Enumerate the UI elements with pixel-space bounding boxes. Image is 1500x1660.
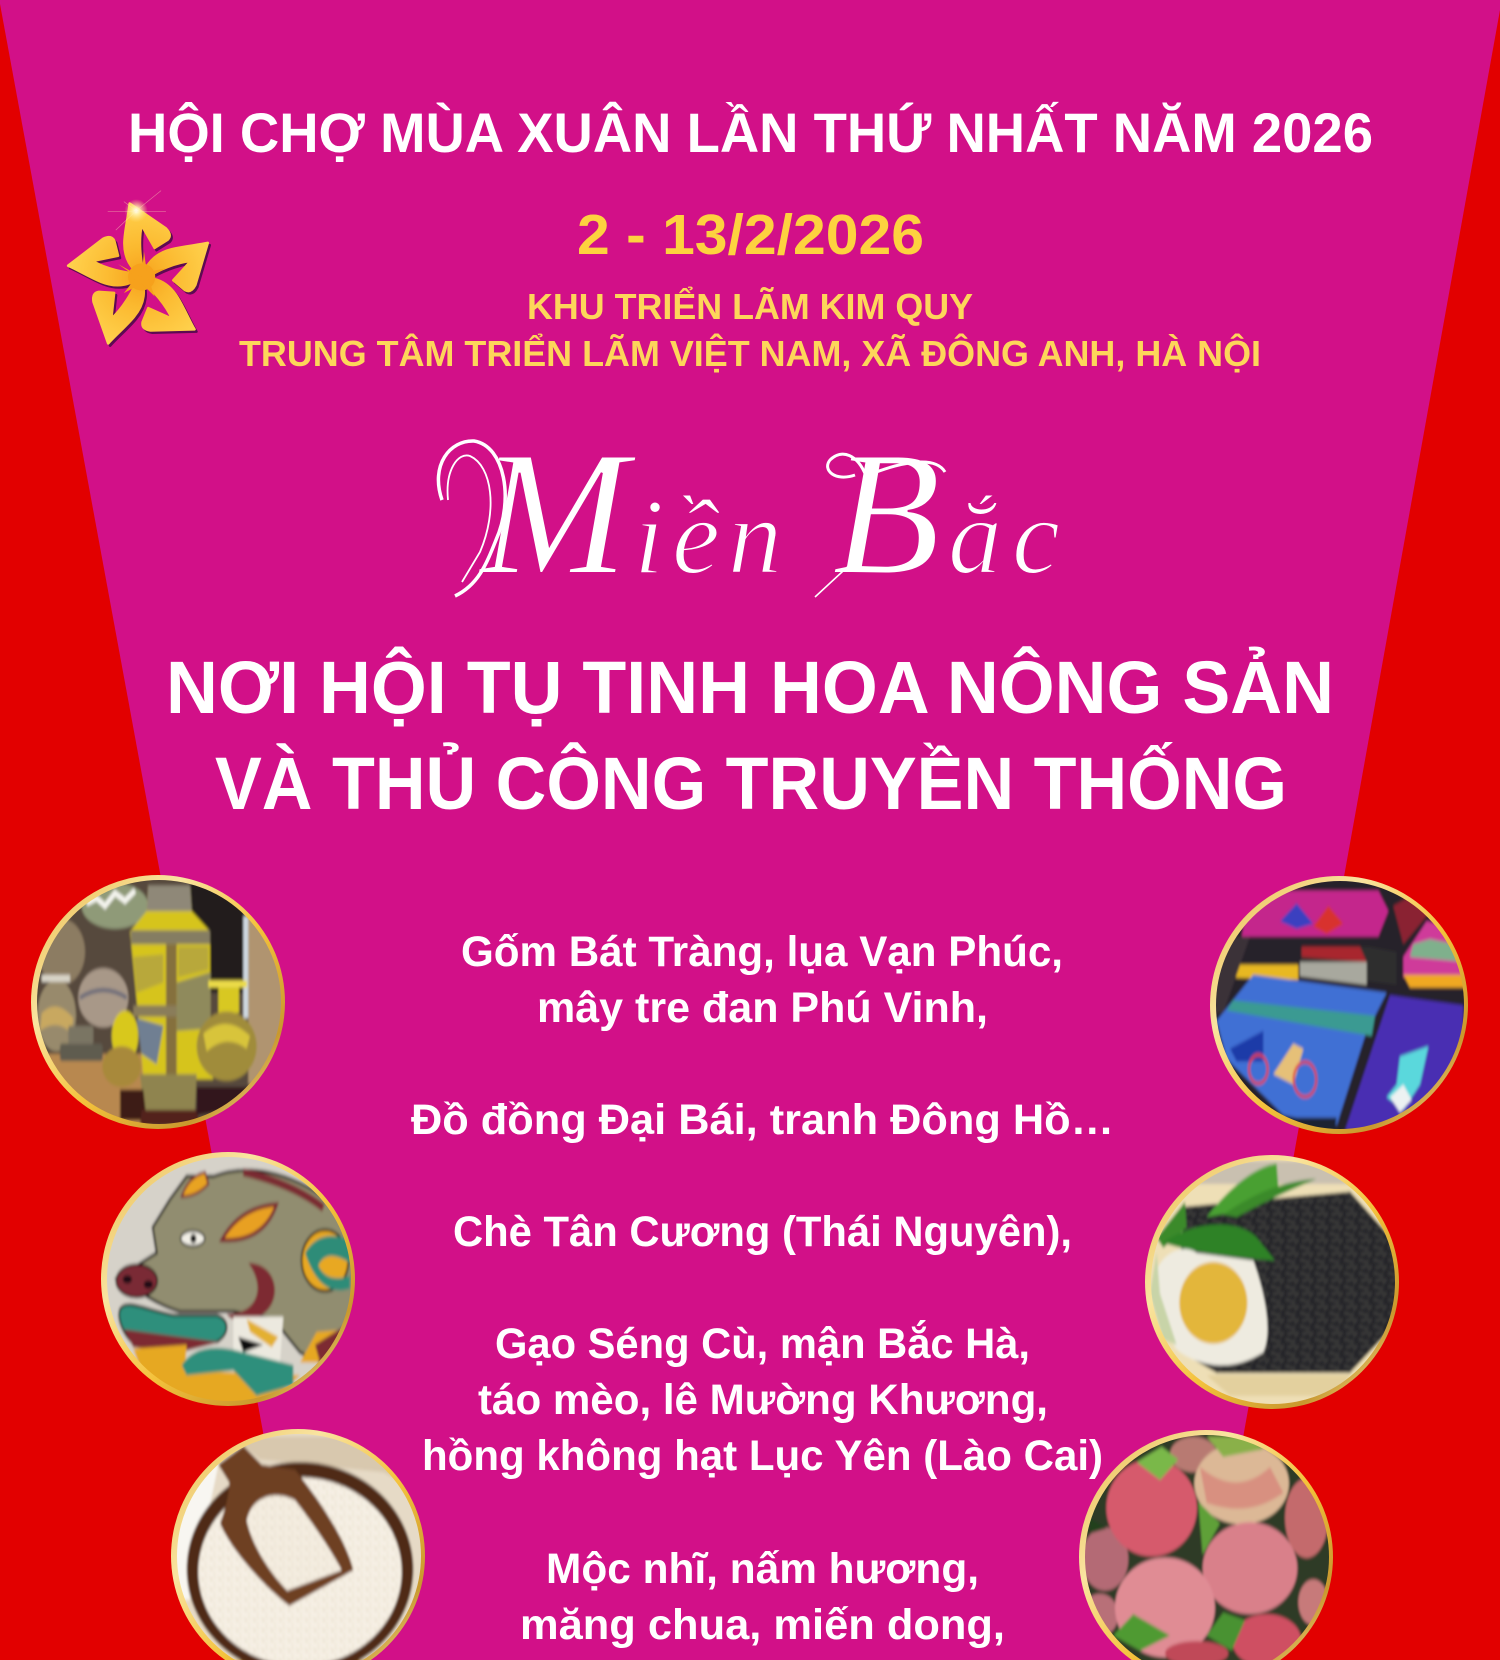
- body text: list of regional products: Đồ đồng Đại Bái, tranh Đông Hồ…: [411, 1096, 1114, 1144]
- body text: list of regional products: mây tre đan Phú Vinh,: [537, 984, 988, 1032]
- script heading: Miền Bắc: M: [477, 414, 637, 612]
- body text: list of regional products: Gốm Bát Tràng, lụa Vạn Phúc,: [461, 928, 1063, 976]
- photo: Bat Trang ceramics: [30, 870, 290, 1136]
- photo: rice bowl: [167, 1426, 430, 1660]
- venue text: [239, 285, 1261, 374]
- body text: list of regional products: Chè Tân Cương (Thái Nguyên),: [453, 1208, 1072, 1256]
- headline: NƠI HỘI TỤ TINH HOA NÔNG SẢN: [166, 646, 1334, 729]
- photo: Tan Cuong tea: [1143, 1151, 1403, 1411]
- logo: golden five-petal flower: [67, 191, 222, 355]
- script heading: Miền Bắc: B: [832, 414, 941, 612]
- date: 2 - 13/2/2026: [577, 203, 924, 267]
- body text: list of regional products: [411, 928, 1114, 1649]
- photo: Dong Ho folk painting: [100, 1151, 357, 1411]
- photo: Bac Ha plums: [1073, 1426, 1340, 1660]
- body text: list of regional products: măng chua, miến dong,: [520, 1601, 1005, 1649]
- body text: list of regional products: Mộc nhĩ, nấm hương,: [546, 1545, 979, 1593]
- photo: embroidered silk bags: [1207, 870, 1473, 1141]
- script heading: Miền Bắc: [438, 414, 1070, 612]
- headline: [166, 646, 1334, 825]
- script heading: Miền Bắc: iền: [634, 478, 790, 597]
- title: fair name: HỘI CHỢ MÙA XUÂN LẦN THỨ NHẤT NĂM 2026: [128, 101, 1373, 164]
- venue text: TRUNG TÂM TRIỂN LÃM VIỆT NAM, XÃ ĐÔNG ANH, HÀ NỘI: [239, 332, 1261, 374]
- body text: list of regional products: Gạo Séng Cù, mận Bắc Hà,: [495, 1319, 1030, 1368]
- script heading: Miền Bắc: ắc: [948, 478, 1070, 597]
- headline: VÀ THỦ CÔNG TRUYỀN THỐNG: [215, 742, 1287, 825]
- venue text: KHU TRIỂN LÃM KIM QUY: [527, 285, 973, 327]
- body text: list of regional products: táo mèo, lê Mường Khương,: [478, 1376, 1048, 1424]
- body text: list of regional products: hồng không hạt Lục Yên (Lào Cai): [422, 1432, 1103, 1480]
